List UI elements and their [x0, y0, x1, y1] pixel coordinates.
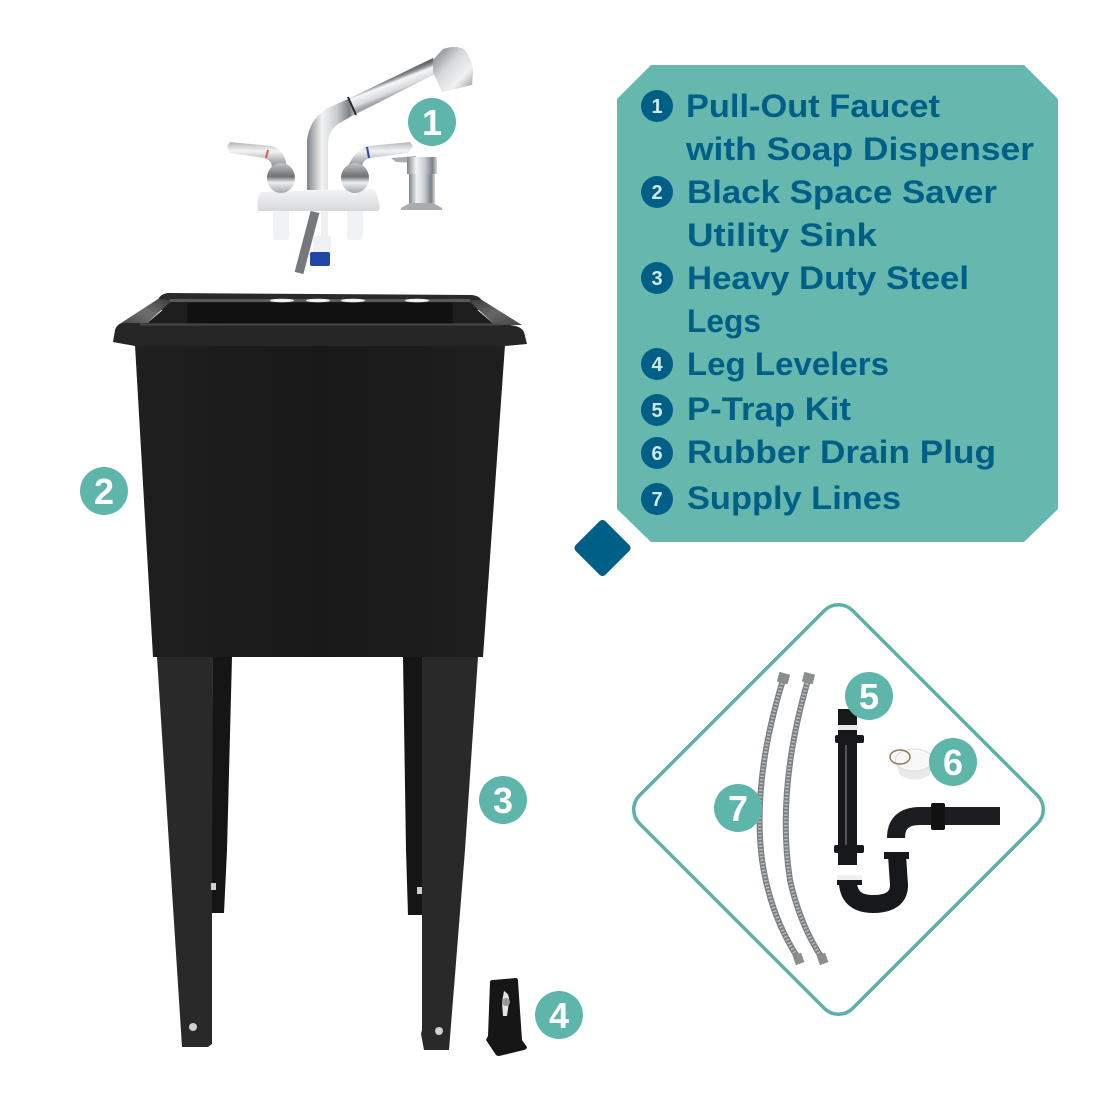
item 2: Black Space Saver: [687, 174, 997, 210]
supply lines: [760, 672, 828, 965]
item 7: 7: [651, 489, 663, 511]
decorative blue diamond: [573, 518, 632, 578]
item 3: Legs: [687, 303, 761, 339]
trap inlet collar: [837, 880, 862, 885]
callout 6: 6: [943, 742, 963, 783]
hose: [299, 212, 315, 273]
elbow collar: [931, 803, 945, 830]
item 2: Utility Sink: [687, 217, 877, 253]
front rim: [113, 323, 527, 346]
spout arm: [348, 58, 437, 114]
spray head: [433, 47, 473, 92]
tailpiece: [838, 709, 857, 865]
callout 2: [80, 467, 128, 515]
callout 1: 1: [422, 102, 442, 143]
callout 2: 2: [94, 471, 114, 512]
trap bend: [848, 855, 899, 904]
callout 5: 5: [859, 676, 879, 717]
item 7: Supply Lines: [687, 480, 901, 516]
faucet illustration: [227, 47, 473, 273]
trap white washer: [837, 875, 862, 880]
hose fittings: [777, 672, 828, 965]
callout 6: [929, 738, 977, 786]
front leg right: [421, 657, 478, 1050]
right sloped rim: [468, 300, 522, 325]
sink: [113, 293, 527, 1050]
spout joint: [348, 97, 356, 115]
panel: accessories diamond outline: [625, 596, 1052, 1023]
leg bolts: [189, 883, 443, 1035]
p-trap kit: [834, 709, 1000, 904]
back leg right: [403, 657, 422, 915]
item 1: Pull-Out Faucet: [686, 88, 940, 124]
left sloped rim: [118, 299, 172, 325]
callout 3: [479, 776, 527, 824]
item 6: Rubber Drain Plug: [687, 434, 996, 470]
item 1: [641, 88, 1034, 167]
item 5: 5: [651, 400, 663, 422]
item 1: 1: [651, 96, 663, 118]
item 2: 2: [651, 182, 663, 204]
basin interior: [145, 302, 495, 325]
item 5: P-Trap Kit: [687, 391, 851, 427]
deck plate: [257, 189, 380, 211]
elbow: [896, 816, 1000, 838]
rubber drain plug: [890, 749, 934, 780]
lower clamp: [834, 845, 864, 853]
callout 4: 4: [549, 995, 569, 1036]
item 3: Heavy Duty Steel: [687, 260, 969, 296]
panel: parts list: [617, 65, 1058, 542]
basin back wall: [187, 303, 453, 325]
leg leveler: [486, 978, 527, 1056]
item 6: 6: [651, 443, 663, 465]
item 1: with Soap Dispenser: [685, 131, 1034, 167]
callout 5: [845, 672, 893, 720]
callout 7: 7: [728, 788, 748, 829]
callout 1: [408, 98, 456, 146]
front rim highlight: [140, 324, 500, 326]
panel background: [617, 65, 1058, 542]
back rim: [158, 293, 482, 310]
right handle: [341, 142, 413, 193]
callout 3: 3: [493, 780, 513, 821]
tailpieces: [273, 210, 363, 240]
item 4: 4: [651, 354, 663, 376]
faucet holes: [270, 299, 429, 302]
soap dispenser: [391, 156, 442, 210]
washer: [838, 725, 858, 730]
item 4: Leg Levelers: [687, 346, 889, 382]
rim highlight: [170, 299, 470, 302]
item 2: [641, 174, 997, 253]
left handle: [227, 142, 295, 193]
item 3: 3: [651, 268, 663, 290]
spout stem: [307, 98, 357, 190]
upper clamp: [835, 735, 864, 743]
outlet connector: [310, 211, 331, 266]
tailpiece highlight: [845, 745, 847, 845]
front leg left: [157, 657, 213, 1047]
back leg left: [211, 657, 232, 913]
item 3: [641, 260, 969, 339]
callout 7: [714, 784, 762, 832]
tub body: [135, 345, 505, 657]
trap cap: [884, 852, 909, 859]
callout 4: [535, 991, 583, 1039]
